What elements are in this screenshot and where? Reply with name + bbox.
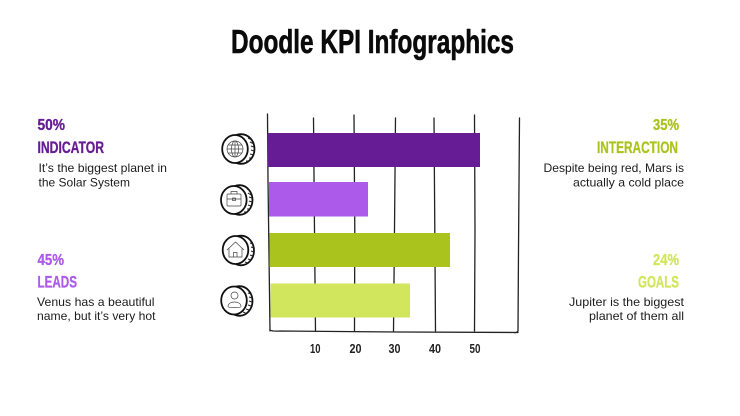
goals heading: GOALS (638, 274, 679, 292)
bar: goals (270, 284, 410, 318)
goals description: planet of them all (589, 309, 684, 323)
icon: briefcase coin (221, 185, 252, 215)
indicator percentage: 50% (38, 117, 65, 134)
block: goals (569, 252, 685, 323)
block: interaction (544, 117, 684, 190)
axis labels: 30 (388, 341, 400, 356)
chart grid (268, 114, 520, 333)
icon: globe coin (222, 134, 254, 164)
axis labels: 20 (350, 341, 362, 356)
icon: house coin (223, 236, 254, 265)
interaction description: Despite being red, Mars is (544, 161, 684, 175)
interaction description: actually a cold place (573, 176, 684, 190)
axis labels: 40 (429, 341, 441, 356)
indicator description: the Solar System (38, 176, 130, 190)
goals description: Jupiter is the biggest (569, 295, 685, 309)
block: indicator (38, 117, 167, 190)
leads description: name, but it’s very hot (37, 309, 156, 323)
indicator heading: INDICATOR (38, 139, 104, 157)
leads heading: LEADS (38, 274, 77, 292)
block: leads (37, 252, 156, 323)
indicator description: It’s the biggest planet in (38, 161, 167, 175)
interaction percentage: 35% (653, 117, 679, 134)
title: Doodle KPI Infographics (231, 23, 514, 60)
axis labels (310, 341, 480, 356)
leads description: Venus has a beautiful (37, 295, 154, 309)
icon: person coin (221, 286, 252, 316)
axis labels: 10 (310, 341, 320, 356)
bar: indicator (268, 133, 480, 167)
interaction heading: INTERACTION (597, 139, 678, 157)
goals percentage: 24% (653, 252, 679, 269)
axis labels: 50 (470, 341, 480, 356)
bar chart (268, 114, 520, 356)
bar: leads (269, 182, 368, 216)
bar: interaction (270, 233, 450, 267)
leads percentage: 45% (38, 252, 64, 269)
